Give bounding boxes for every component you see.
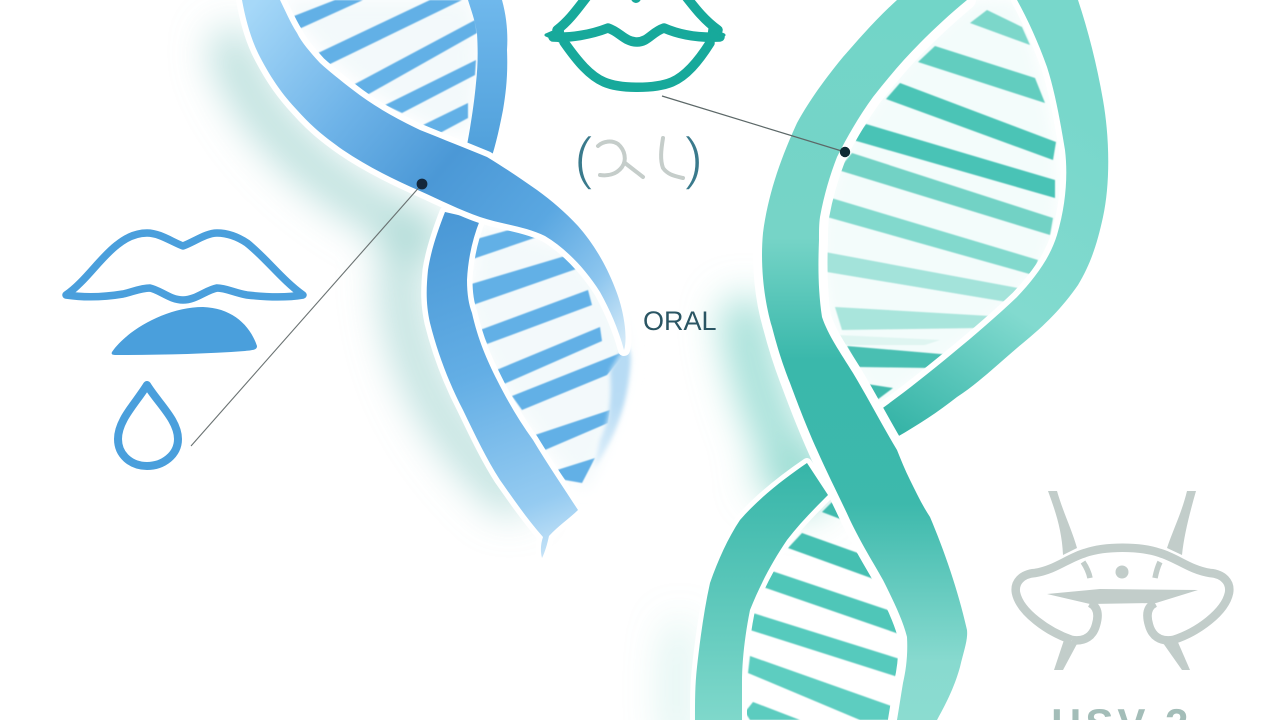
pale background between blue rungs <box>285 0 628 490</box>
blue pale fading strand <box>594 345 631 468</box>
blue front strand <box>242 0 626 350</box>
blue droplet <box>118 385 178 466</box>
blue helix shadow <box>232 50 510 495</box>
blue lower strand <box>427 212 578 558</box>
green rungs lower <box>745 502 903 720</box>
connector line: droplet to blue helix <box>191 179 427 446</box>
connector line: teal lips to green helix <box>662 96 850 157</box>
label: ORAL: ORAL <box>643 306 717 336</box>
right parenthesis: ) <box>684 126 703 191</box>
green rungs upper <box>825 10 1056 400</box>
green right strand <box>880 0 1108 437</box>
green DNA helix <box>676 0 1108 720</box>
icon: teal lips <box>546 0 724 87</box>
icon: gray HSV-2 symbol <box>1016 491 1229 670</box>
garbled label in parentheses <box>574 126 703 191</box>
blue upper back strand <box>466 0 507 156</box>
blue rungs <box>294 0 628 483</box>
green front strand <box>762 0 967 720</box>
garbled marks <box>598 138 683 178</box>
blue DNA helix <box>232 0 631 558</box>
icon: blue lips, tongue and droplet <box>66 233 303 466</box>
blue lips outline <box>66 233 303 300</box>
green lower-left strand <box>695 463 828 720</box>
left parenthesis: ( <box>574 126 593 191</box>
green helix shadow <box>676 320 825 720</box>
blue tongue <box>112 307 257 355</box>
pale background between green rungs <box>822 0 1057 405</box>
